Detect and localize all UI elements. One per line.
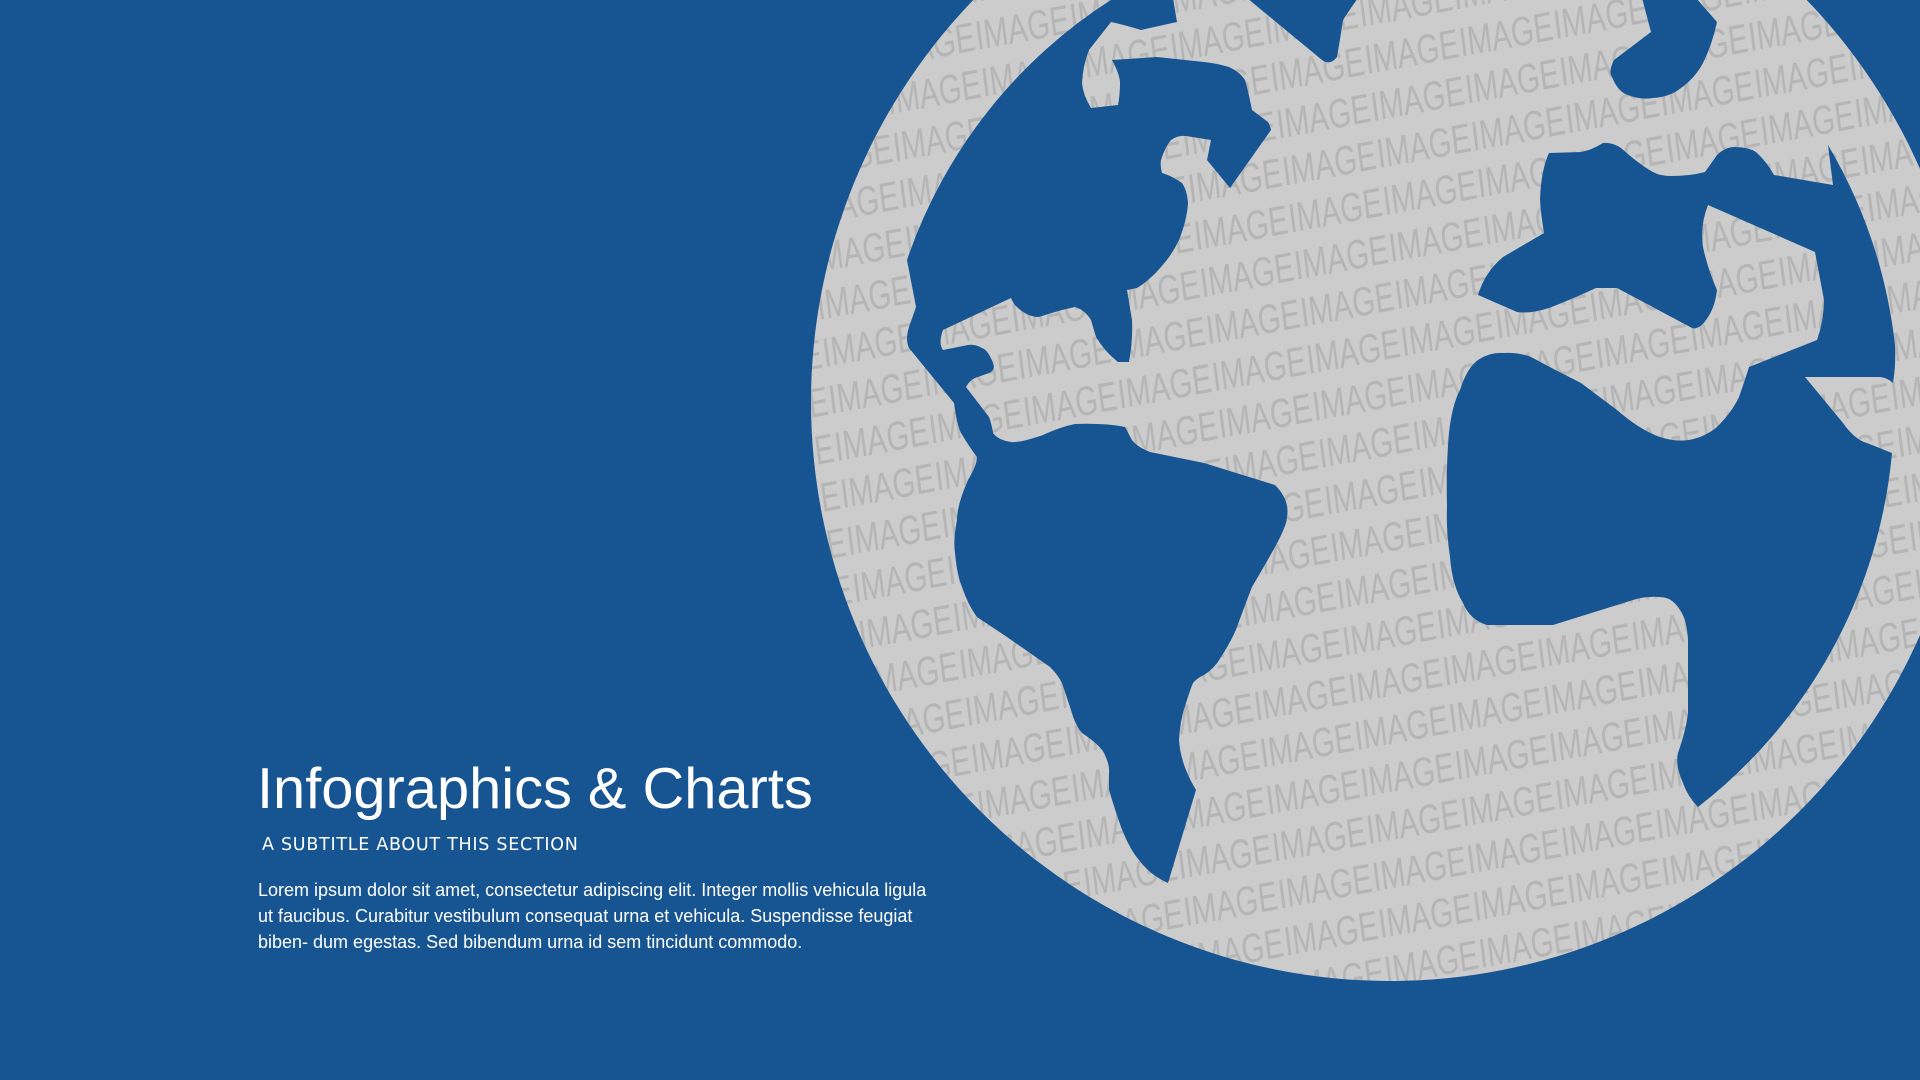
subtitle: A SUBTITLE ABOUT THIS SECTION: [262, 835, 579, 855]
continent: Greenland: [1247, 0, 1358, 62]
continent: Eurasia and Africa: [1447, 143, 1895, 807]
title: Infographics & Charts: [257, 757, 813, 821]
body text: biben- dum egestas. Sed bibendum urna id sem tincidunt commodo.: [258, 932, 802, 952]
body text: ut faucibus. Curabitur vestibulum consequat urna et vehicula. Suspendisse feugiat: [258, 906, 912, 926]
globe disc with IMAGE watermark: [811, 0, 1920, 981]
body text: Lorem ipsum dolor sit amet, consectetur adipiscing elit. Integer mollis vehicula ligula: [258, 880, 926, 900]
continent: northern island: [1610, 0, 1717, 99]
body text: [258, 880, 926, 952]
continent: the Americas: [907, 0, 1288, 883]
